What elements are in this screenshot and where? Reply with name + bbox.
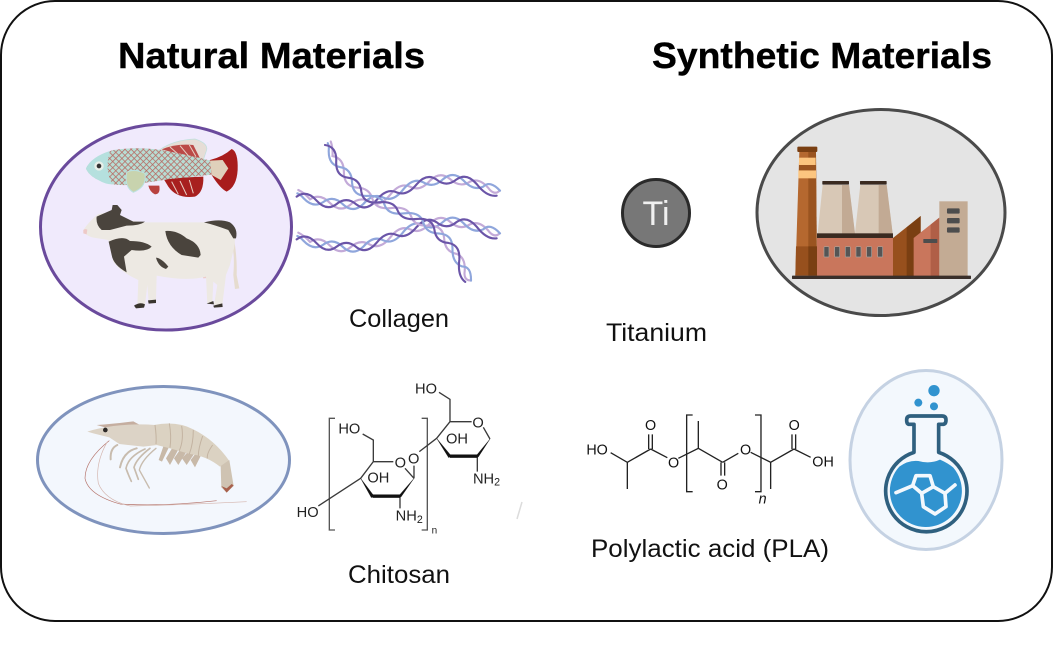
right ring wedges xyxy=(437,438,490,458)
panel: fish and cow circle xyxy=(40,124,292,330)
panel: factory circle xyxy=(757,110,1005,316)
atom labels: n xyxy=(432,526,437,537)
icon: titanium element: Ti xyxy=(642,195,670,233)
bonds xyxy=(611,421,811,489)
icon: factory xyxy=(792,147,971,279)
atom labels: HO xyxy=(415,381,437,397)
label: polylactic acid: Polylactic acid (PLA) xyxy=(591,535,829,563)
atom labels: O xyxy=(668,455,679,471)
atom labels: n xyxy=(759,491,767,507)
chemical structure: polylactic acid xyxy=(586,415,834,507)
icon: fish xyxy=(86,139,238,197)
atom labels: O xyxy=(408,451,419,467)
illustration: collagen fibres xyxy=(297,130,500,294)
atom labels: O xyxy=(717,477,728,493)
icon: cow xyxy=(83,205,239,308)
icon: titanium element xyxy=(622,180,690,246)
left ring wedges xyxy=(361,478,414,498)
label: titanium: Titanium xyxy=(606,319,707,347)
panel: shrimp oval xyxy=(38,386,290,534)
brackets xyxy=(329,418,427,530)
atom labels: OH xyxy=(812,454,834,470)
panel: flask oval xyxy=(850,370,1002,550)
strand bundle: upper fibre xyxy=(297,175,500,209)
strand bundle: lower fibre xyxy=(297,218,500,252)
heading: natural materials: Natural Materials xyxy=(118,35,425,76)
chemical structure: chitosan xyxy=(297,381,500,537)
label: collagen: Collagen xyxy=(349,305,449,333)
icon: shrimp xyxy=(85,421,247,506)
atom labels: NH xyxy=(396,509,417,525)
atom labels: O xyxy=(395,456,406,472)
atom labels: 2 xyxy=(494,477,500,489)
left ring bonds xyxy=(318,434,437,508)
atom labels: O xyxy=(645,418,656,434)
heading: synthetic materials: Synthetic Materials xyxy=(652,35,992,76)
atom labels: 2 xyxy=(417,514,423,526)
atom labels: HO xyxy=(338,421,360,437)
atom labels xyxy=(297,381,500,537)
atom labels: HO xyxy=(297,505,319,521)
atom labels: OH xyxy=(367,471,389,487)
atom labels xyxy=(586,418,834,507)
right ring bonds xyxy=(437,392,490,472)
atom labels: O xyxy=(472,415,484,431)
bubbles xyxy=(914,385,940,410)
strand bundle: crossing fibre xyxy=(317,130,482,294)
brackets xyxy=(687,415,761,492)
icon: flask xyxy=(886,385,967,532)
stray mark xyxy=(517,502,522,519)
atom labels: NH xyxy=(473,471,494,487)
atom labels: OH xyxy=(446,431,468,447)
atom labels: HO xyxy=(586,442,608,458)
label: chitosan: Chitosan xyxy=(348,561,450,589)
atom labels: O xyxy=(740,443,751,459)
atom labels: O xyxy=(789,418,800,434)
